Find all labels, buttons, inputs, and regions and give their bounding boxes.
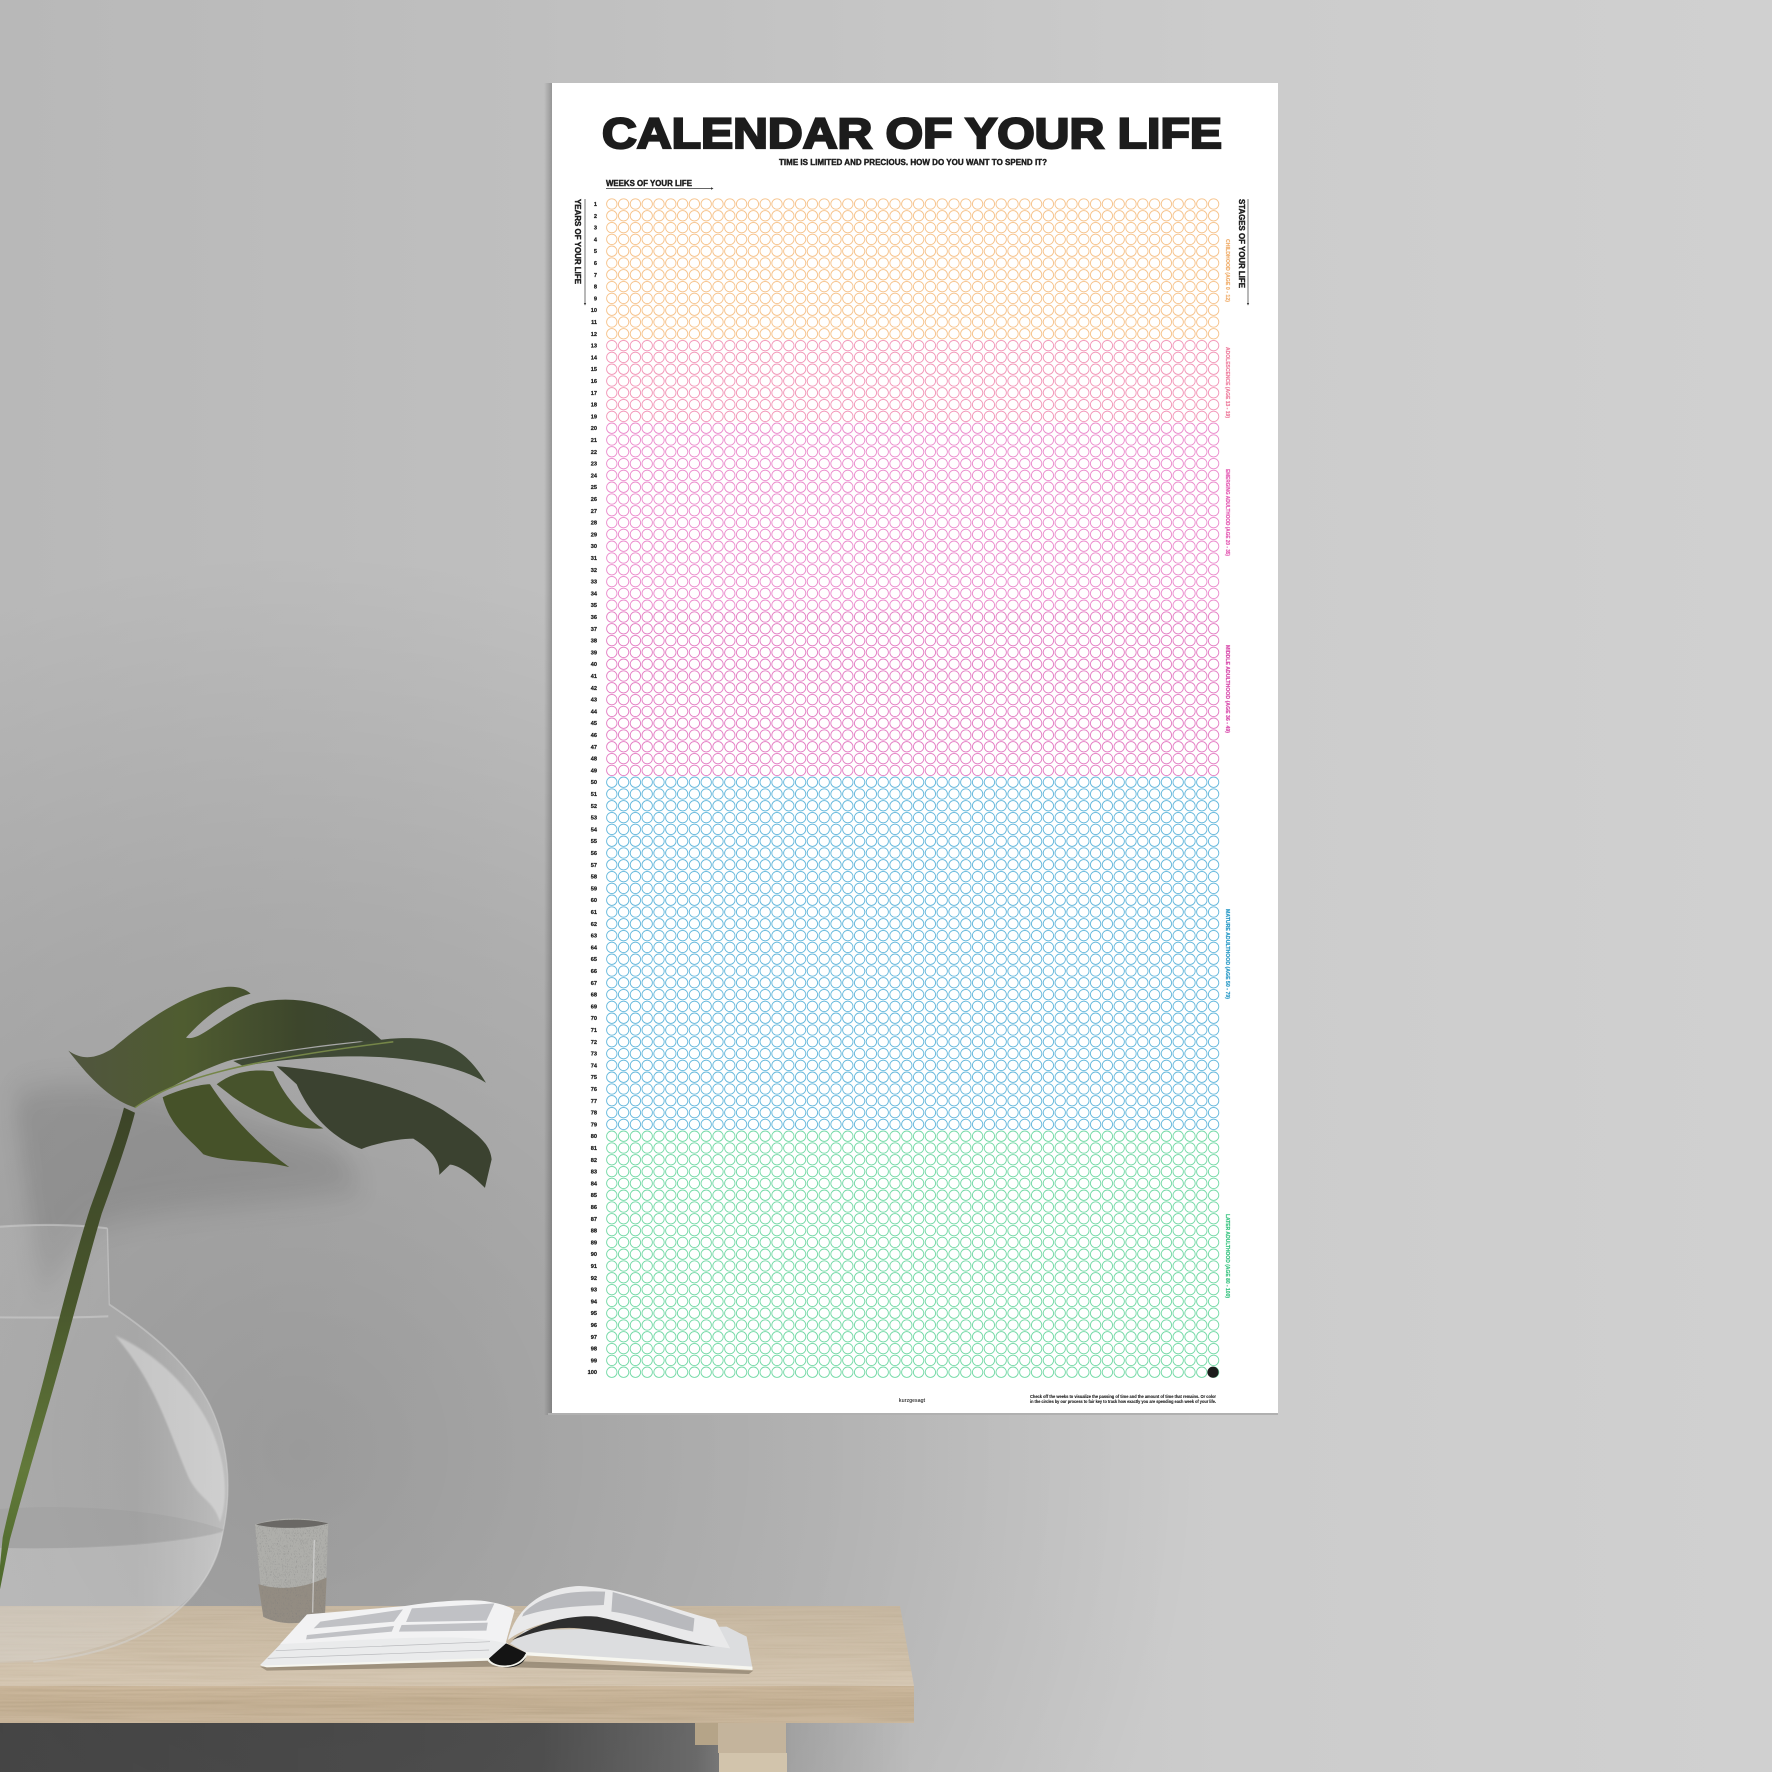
year numbers 1 to 100: 57: [591, 863, 597, 869]
table front edge: [0, 1686, 914, 1723]
year numbers 1 to 100: 88: [591, 1229, 597, 1235]
year numbers 1 to 100: 64: [591, 945, 598, 951]
year numbers 1 to 100: 74: [591, 1063, 598, 1069]
leaf: upper lobes: [68, 987, 397, 1108]
year numbers 1 to 100: 86: [591, 1205, 597, 1211]
year numbers 1 to 100: 89: [591, 1240, 597, 1246]
leaf: middle lobe: [217, 1070, 323, 1129]
year numbers 1 to 100: 62: [591, 922, 597, 928]
year numbers 1 to 100: 45: [591, 721, 597, 727]
year numbers 1 to 100: 61: [591, 910, 597, 916]
right page text blocks: [522, 1591, 694, 1632]
stages axis heading with arrow: STAGES OF YOUR LIFE: [1237, 199, 1246, 289]
stage label: emerging adulthood: EMERGING ADULTHOOD (AGE 20 - 35): [1224, 469, 1230, 556]
year numbers 1 to 100: 47: [591, 745, 597, 751]
year numbers 1 to 100: 44: [591, 709, 598, 715]
year numbers 1 to 100: 59: [591, 886, 597, 892]
year numbers 1 to 100: 22: [591, 450, 597, 456]
band: middle adulthood, years 36-49: [607, 612, 1219, 776]
year numbers 1 to 100: 21: [591, 438, 597, 444]
year numbers 1 to 100: 2: [594, 214, 597, 220]
year numbers 1 to 100: 48: [591, 757, 597, 763]
year numbers 1 to 100: 76: [591, 1087, 597, 1093]
table back leg: [695, 1722, 721, 1745]
years axis heading with arrow: YEARS OF YOUR LIFE: [573, 199, 582, 285]
year numbers 1 to 100: 66: [591, 969, 597, 975]
dark space under the table: [0, 1722, 1200, 1772]
book spine: [489, 1643, 526, 1667]
year numbers 1 to 100: 65: [591, 957, 597, 963]
year numbers 1 to 100: 4: [594, 237, 598, 243]
year numbers 1 to 100: 40: [591, 662, 597, 668]
year numbers 1 to 100: 50: [591, 780, 597, 786]
band: emerging adulthood, years 20-35: [607, 423, 1219, 610]
band: mature adulthood, years 50-79: [607, 777, 1219, 1130]
year numbers 1 to 100: 19: [591, 414, 597, 420]
year numbers 1 to 100: 97: [591, 1335, 597, 1341]
year numbers 1 to 100: 85: [591, 1193, 597, 1199]
table front leg: [718, 1722, 787, 1772]
year numbers 1 to 100: 36: [591, 615, 597, 621]
year numbers 1 to 100: 73: [591, 1052, 597, 1058]
year numbers 1 to 100: 27: [591, 509, 597, 515]
poster shadow: [544, 83, 552, 1415]
week grid: 52 circles by 100 years: [607, 199, 1219, 1377]
year numbers 1 to 100: 8: [594, 285, 597, 291]
year numbers 1 to 100: 28: [591, 521, 597, 527]
band: later adulthood, years 80-100: [607, 1131, 1219, 1377]
leaf shadow on wall: [13, 1085, 367, 1291]
year numbers 1 to 100: 51: [591, 792, 597, 798]
year numbers 1 to 100: 32: [591, 568, 597, 574]
year numbers 1 to 100: 35: [591, 603, 597, 609]
leaf: far right lobe: [233, 1038, 486, 1083]
band: adolescence, years 13-19: [607, 340, 1219, 422]
band: childhood, years 1-12: [607, 199, 1219, 339]
year numbers 1 to 100: 58: [591, 875, 597, 881]
vase highlight: [115, 1335, 225, 1522]
year numbers 1 to 100: 82: [591, 1158, 597, 1164]
year numbers 1 to 100: 41: [591, 674, 597, 680]
table: [0, 1606, 914, 1772]
year numbers 1 to 100: 9: [594, 296, 597, 302]
year numbers 1 to 100: 6: [594, 261, 597, 267]
year numbers 1 to 100: 18: [591, 403, 597, 409]
year numbers 1 to 100: 1: [594, 202, 597, 208]
year numbers 1 to 100: 29: [591, 532, 597, 538]
credit: kurzgesagt: [899, 1398, 926, 1404]
weeks axis heading with arrow: [606, 179, 714, 190]
year numbers 1 to 100: 84: [591, 1181, 598, 1187]
year numbers 1 to 100: 20: [591, 426, 597, 432]
year numbers 1 to 100: 75: [591, 1075, 597, 1081]
leaf: right hanging lobes: [277, 1066, 492, 1188]
year numbers 1 to 100: 14: [591, 355, 598, 361]
year numbers 1 to 100: 100: [588, 1370, 597, 1376]
filled final dot: [1207, 1367, 1219, 1378]
right page block: [510, 1627, 752, 1668]
year numbers 1 to 100: 34: [591, 591, 598, 597]
year numbers 1 to 100: 68: [591, 993, 597, 999]
year numbers 1 to 100: 93: [591, 1288, 597, 1294]
year numbers 1 to 100: 99: [591, 1358, 597, 1364]
years axis heading with arrow: [573, 199, 586, 306]
year numbers 1 to 100: 92: [591, 1276, 597, 1282]
year numbers 1 to 100: 24: [591, 473, 598, 479]
year numbers 1 to 100: 5: [594, 249, 597, 255]
left page: [280, 1600, 515, 1644]
year numbers 1 to 100: 38: [591, 639, 597, 645]
year numbers 1 to 100: 71: [591, 1028, 597, 1034]
stage label: adolescence: ADOLESCENCE (AGE 13 - 19): [1224, 347, 1230, 418]
year numbers 1 to 100: 17: [591, 391, 597, 397]
footer note: in the circles by our process to fair key to track how exactly you are spending each week of your life.: [1030, 1399, 1216, 1404]
leaf midrib: [135, 1042, 393, 1108]
year numbers 1 to 100: 13: [591, 344, 597, 350]
stage labels: [1224, 239, 1230, 1298]
year numbers 1 to 100: 11: [591, 320, 597, 326]
year numbers 1 to 100: 79: [591, 1122, 597, 1128]
year numbers 1 to 100: 52: [591, 804, 597, 810]
year numbers 1 to 100: 37: [591, 627, 597, 633]
year numbers 1 to 100: 7: [594, 273, 597, 279]
year numbers 1 to 100: 42: [591, 686, 597, 692]
year numbers 1 to 100: 33: [591, 580, 597, 586]
poster content: [573, 110, 1249, 1404]
year numbers 1 to 100: 60: [591, 898, 597, 904]
right page: [508, 1586, 730, 1648]
stage label: childhood: CHILDHOOD (AGE 0 - 12): [1224, 239, 1230, 302]
vase glass body: [0, 1225, 228, 1663]
book covers: [260, 1652, 752, 1670]
year numbers 1 to 100: 55: [591, 839, 597, 845]
subtitle: TIME IS LIMITED AND PRECIOUS. HOW DO YOU WANT TO SPEND IT?: [779, 158, 1047, 167]
year numbers 1 to 100: 83: [591, 1170, 597, 1176]
year numbers 1 to 100: 23: [591, 462, 597, 468]
stage label: later adulthood: LATER ADULTHOOD (AGE 80 - 100): [1224, 1214, 1230, 1298]
stage label: mature adulthood: MATURE ADULTHOOD (AGE 50 - 79): [1224, 909, 1230, 999]
year numbers 1 to 100: 81: [591, 1146, 597, 1152]
right page underside shadow: [512, 1616, 715, 1647]
year numbers 1 to 100: 87: [591, 1217, 597, 1223]
year numbers 1 to 100: 16: [591, 379, 597, 385]
vase: [0, 1225, 228, 1663]
year numbers 1 to 100: 53: [591, 816, 597, 822]
year numbers 1 to 100: 25: [591, 485, 597, 491]
year numbers 1 to 100: 3: [594, 226, 597, 232]
title: CALENDAR OF YOUR LIFE: [602, 110, 1222, 158]
year numbers 1 to 100: 96: [591, 1323, 597, 1329]
poster: [544, 83, 1278, 1415]
year numbers 1 to 100: 31: [591, 556, 597, 562]
footer note: [1030, 1394, 1216, 1404]
year numbers 1 to 100: 94: [591, 1299, 598, 1305]
year numbers 1 to 100: 12: [591, 332, 597, 338]
year numbers 1 to 100: 90: [591, 1252, 597, 1258]
year numbers 1 to 100: 98: [591, 1347, 597, 1353]
year numbers 1 to 100: 77: [591, 1099, 597, 1105]
year numbers 1 to 100: 54: [591, 827, 598, 833]
book shadow: [260, 1660, 753, 1674]
year numbers 1 to 100: 43: [591, 698, 597, 704]
year numbers 1 to 100: 56: [591, 851, 597, 857]
footer note: Check off the weeks to visualize the passing of time and the amount of time that remains. Or color: [1030, 1394, 1216, 1399]
water lower glass: [0, 1532, 223, 1662]
stage label: middle adulthood: MIDDLE ADULTHOOD (AGE 36 - 49): [1224, 645, 1230, 733]
table top surface: [0, 1606, 914, 1686]
vase neck rim and outlines: [0, 1225, 228, 1662]
year numbers 1 to 100: 15: [591, 367, 597, 373]
plant: [0, 987, 492, 1589]
year numbers 1 to 100: 69: [591, 1004, 597, 1010]
year numbers 1 to 100: 10: [591, 308, 597, 314]
left page text blocks: [306, 1603, 494, 1639]
leaf: lower lobe: [163, 1084, 289, 1167]
year numbers 1 to 100: 80: [591, 1134, 597, 1140]
year numbers 1 to 100: 30: [591, 544, 597, 550]
year numbers 1 to 100: 95: [591, 1311, 597, 1317]
plant stem: [0, 1108, 135, 1589]
year numbers 1 to 100: 26: [591, 497, 597, 503]
water surface: [0, 1507, 224, 1548]
year numbers 1 to 100: 39: [591, 650, 597, 656]
year numbers 1 to 100: 67: [591, 981, 597, 987]
year numbers 1 to 100: 70: [591, 1016, 597, 1022]
year numbers 1 to 100: 63: [591, 934, 597, 940]
open book: [260, 1586, 753, 1674]
cup: [255, 1519, 328, 1623]
year numbers 1 to 100: 78: [591, 1111, 597, 1117]
weeks axis heading with arrow: WEEKS OF YOUR LIFE: [606, 179, 693, 188]
stages axis heading with arrow: [1237, 199, 1249, 306]
year numbers 1 to 100: 46: [591, 733, 597, 739]
year numbers 1 to 100: 72: [591, 1040, 597, 1046]
year numbers 1 to 100: 49: [591, 768, 597, 774]
year numbers 1 to 100: 91: [591, 1264, 597, 1270]
left page block: [260, 1633, 508, 1667]
